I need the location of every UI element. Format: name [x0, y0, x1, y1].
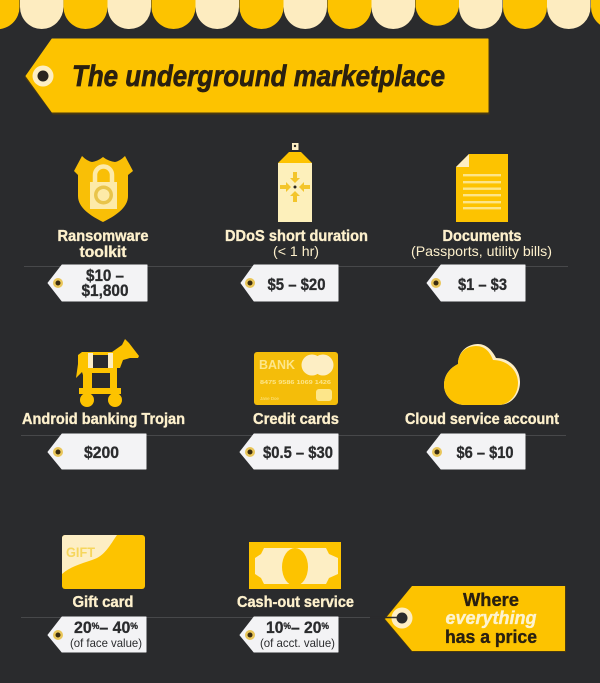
price tag: %	[321, 621, 329, 631]
item: gift card	[48, 535, 146, 652]
icon: spray can	[278, 143, 312, 222]
price tag	[427, 265, 525, 301]
icon: cloud	[444, 344, 520, 405]
label: Gift card	[72, 594, 134, 611]
price tag	[427, 434, 525, 469]
label: Ransomware	[58, 228, 149, 245]
price tag: $200	[84, 444, 119, 462]
price tag: 20	[74, 619, 92, 637]
icon: bank card: BANK	[259, 357, 296, 372]
item: DDoS short duration: (< 1 hr)	[273, 243, 319, 259]
price tag: (of face value)	[70, 636, 142, 650]
price tag	[241, 265, 338, 301]
price tag: – 40	[99, 619, 130, 637]
item: credit cards	[240, 352, 339, 469]
price tag: 10	[266, 619, 284, 637]
label: Cloud service account	[405, 411, 559, 428]
price tag: $0.5 – $30	[263, 444, 333, 462]
price tag: $6 – $10	[456, 444, 514, 462]
icon: document	[456, 154, 508, 222]
price tag: $1 – $3	[458, 276, 507, 294]
price tag	[48, 265, 147, 301]
label: Android banking Trojan	[22, 411, 185, 428]
callout tag: where everything has a price	[370, 586, 566, 652]
item: ransomware toolkit	[48, 156, 149, 301]
icon: gift card: GIFT	[66, 544, 95, 560]
label: DDoS short duration	[225, 228, 368, 245]
callout tag: where everything has a price: has a price	[445, 626, 537, 647]
awning scallops	[0, 0, 600, 29]
price tag	[48, 617, 146, 652]
icon: trojan horse	[76, 339, 139, 407]
price tag: (of acct. value)	[260, 636, 335, 650]
icon: bank card	[254, 352, 338, 405]
item: cloud service account	[405, 344, 559, 469]
price tag	[48, 434, 146, 469]
item: ransomware toolkit: toolkit	[80, 244, 126, 261]
price tag	[240, 617, 338, 652]
label: Documents	[442, 228, 522, 245]
price tag: $1,800	[82, 282, 128, 300]
icon: bank card: Jane Doe	[260, 396, 279, 401]
icon: bank card: 8475 9586 1069 1426	[260, 380, 331, 386]
row divider lines	[21, 266, 568, 618]
label: Credit cards	[253, 411, 339, 428]
item: documents	[411, 154, 552, 301]
callout tag: where everything has a price: everything	[446, 607, 536, 628]
label: Cash-out service	[237, 594, 354, 611]
price tag: – 20	[291, 619, 321, 637]
price tag: %	[283, 621, 291, 631]
price tag: %	[92, 621, 99, 631]
price tag: $10 –	[86, 267, 124, 285]
price tag: %	[130, 621, 138, 631]
price tag: $5 – $20	[268, 276, 326, 294]
title: The underground marketplace	[72, 60, 445, 93]
icon: banknote	[249, 542, 341, 589]
icon: shield with padlock	[74, 156, 133, 222]
item: Android banking Trojan	[22, 339, 185, 469]
item: cash-out service	[237, 542, 354, 652]
item: documents: (Passports, utility bills)	[411, 243, 552, 259]
callout tag: where everything has a price: Where	[463, 589, 519, 610]
title tag	[25, 39, 489, 114]
item: DDoS short duration	[225, 143, 368, 301]
